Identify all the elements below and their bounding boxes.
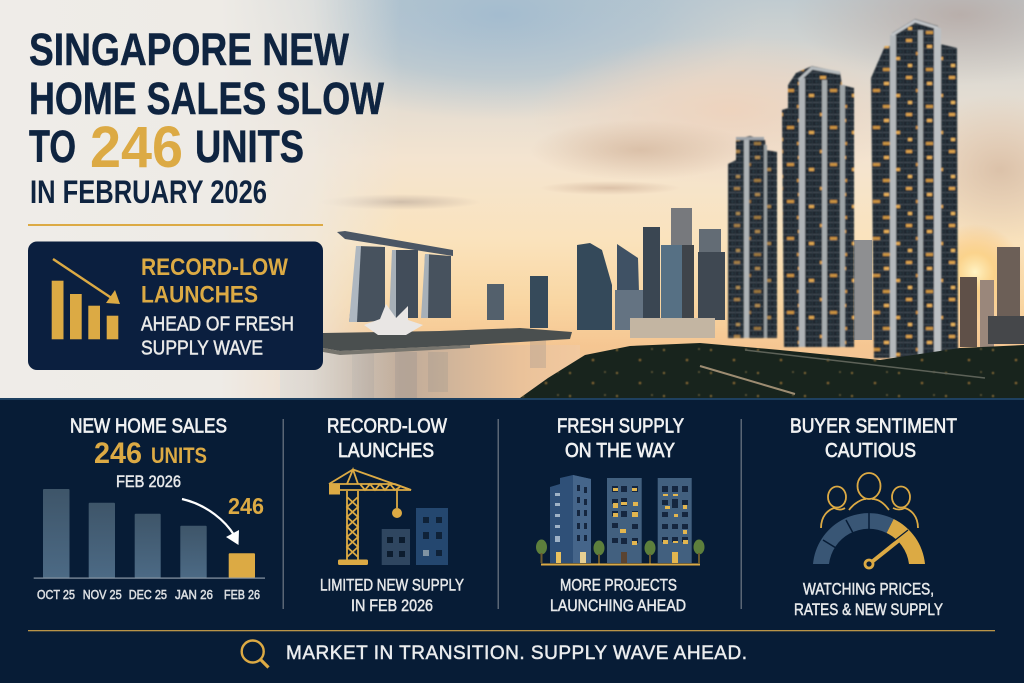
title	[29, 24, 384, 210]
caption: LAUNCHING AHEAD	[550, 597, 686, 615]
caption: RATES & NEW SUPPLY	[794, 601, 943, 619]
callout panel: record-low launches	[28, 242, 323, 370]
key figure	[94, 437, 207, 470]
downtown towers	[530, 208, 725, 338]
left whitewash	[0, 0, 400, 398]
callout text	[141, 254, 294, 360]
icon: tall building	[416, 508, 448, 565]
caption: LIMITED NEW SUPPLY	[320, 577, 464, 595]
title: TO	[29, 121, 76, 172]
caption: WATCHING PRICES,	[803, 580, 934, 598]
date: FEB 2026	[116, 473, 181, 491]
bar chart: FEB 26	[224, 587, 260, 602]
icon: apartment block 1	[550, 475, 591, 563]
panel: record-low launches	[320, 416, 464, 615]
icon: small building	[382, 529, 410, 565]
callout text: LAUNCHES	[141, 282, 258, 309]
callout text: RECORD-LOW	[141, 254, 288, 281]
heading	[557, 416, 684, 462]
ground line	[541, 564, 700, 566]
icon: construction crane	[329, 470, 411, 565]
sun glow	[927, 224, 1023, 320]
caption	[550, 577, 686, 615]
icon: magnifier	[242, 640, 268, 668]
waterfront land	[323, 328, 572, 355]
bar chart: OCT 25	[37, 587, 75, 602]
icon: trees	[536, 540, 704, 564]
bar chart: DEC 25	[129, 587, 167, 602]
icon: people	[821, 473, 918, 528]
bar chart	[34, 489, 265, 602]
icon: apartment block 3	[658, 478, 692, 563]
icon: sentiment gauge	[813, 513, 925, 568]
footer text: MARKET IN TRANSITION. SUPPLY WAVE AHEAD.	[286, 643, 747, 664]
heading: FRESH SUPPLY	[557, 416, 684, 438]
residential tower right	[871, 19, 958, 358]
hero photo: skyline at sunset	[0, 0, 1024, 398]
heading	[790, 416, 957, 462]
title: 246	[90, 115, 183, 180]
residential tower left	[728, 136, 777, 338]
title: UNITS	[195, 121, 304, 172]
heading: BUYER SENTIMENT	[790, 416, 957, 438]
title: HOME SALES SLOW	[29, 73, 384, 124]
icon: apartment block 2	[607, 478, 642, 563]
bar chart: JAN 26	[175, 587, 213, 602]
panel: fresh supply	[536, 416, 704, 615]
bar chart: 246	[228, 493, 264, 519]
bottom band	[0, 398, 1024, 683]
Marina Bay Sands	[337, 231, 453, 335]
heading: NEW HOME SALES	[70, 416, 227, 438]
callout text: AHEAD OF FRESH	[141, 314, 294, 336]
heading: CAUTIOUS	[825, 440, 916, 462]
icon: falling bar chart	[52, 259, 120, 339]
water	[280, 340, 580, 398]
arrow	[182, 499, 239, 545]
heading: RECORD-LOW	[327, 416, 447, 438]
footer takeaway	[242, 640, 747, 668]
caption: MORE PROJECTS	[560, 577, 677, 595]
caption: IN FEB 2026	[351, 597, 433, 615]
caption	[794, 580, 943, 619]
caption	[320, 577, 464, 615]
residential tower centre	[782, 66, 854, 347]
bar chart: NOV 25	[83, 587, 122, 602]
heading	[327, 416, 447, 462]
distant towers	[854, 240, 1024, 350]
panel: buyer sentiment	[790, 416, 957, 619]
title: IN FEBRUARY 2026	[30, 174, 267, 210]
park and greenery	[520, 343, 1024, 398]
key figure: 246	[94, 437, 142, 470]
panel: new home sales	[34, 416, 265, 602]
heading: LAUNCHES	[338, 440, 434, 462]
heading: ON THE WAY	[565, 440, 675, 462]
callout text: SUPPLY WAVE	[141, 338, 263, 360]
key figure: UNITS	[151, 443, 207, 468]
title: SINGAPORE NEW	[29, 24, 349, 75]
